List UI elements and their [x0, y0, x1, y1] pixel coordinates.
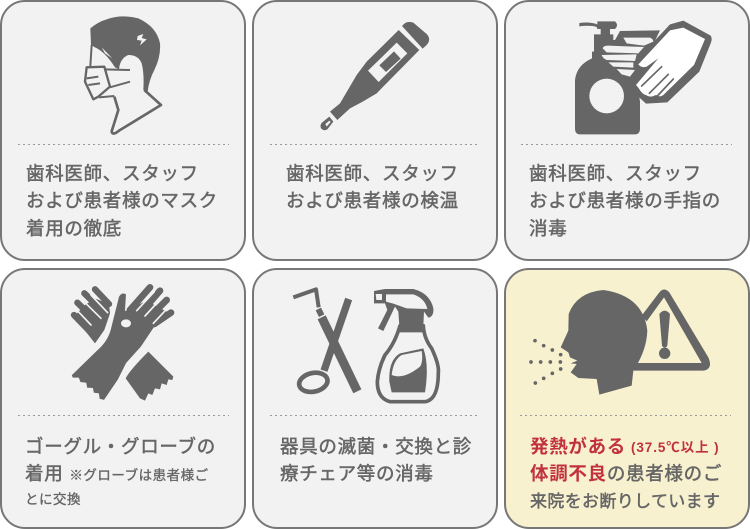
icon: dental tools	[293, 289, 357, 394]
panel: goggles and gloves	[1, 269, 245, 528]
icon: soap and hand	[575, 21, 712, 134]
panel: fever warning	[505, 269, 749, 528]
text: hand disinfection	[529, 163, 721, 239]
icon: masked face	[85, 16, 161, 134]
panel: instrument sterilisation	[253, 269, 497, 528]
text: hand disinfection: および患者様の手指の	[529, 190, 721, 211]
text: instrument sterilisation	[280, 436, 472, 484]
text: mask: および患者様のマスク	[26, 190, 218, 211]
text: fever warning: 体調不良の患者様のご	[530, 463, 722, 484]
text: instrument sterilisation: 器具の滅菌・交換と診	[280, 436, 472, 457]
text: gloves: とに交換	[25, 492, 81, 507]
text: instrument sterilisation: 療チェア等の消毒	[280, 463, 434, 484]
text: gloves: 着用 ※グローブは患者様ご	[25, 463, 209, 484]
icon: coughing head	[529, 290, 647, 395]
text: mask: 着用の徹底	[26, 218, 122, 239]
text: fever warning	[530, 436, 722, 511]
text: mask: 歯科医師、スタッフ	[26, 163, 199, 184]
icon: spray bottle	[374, 289, 438, 402]
text: fever warning: 来院をお断りしています	[530, 492, 720, 511]
text: thermometer	[286, 163, 459, 211]
text: thermometer: および患者様の検温	[286, 190, 459, 211]
text: gloves	[25, 436, 216, 507]
panel: hand disinfection	[505, 1, 749, 260]
panel: thermometer	[253, 1, 497, 260]
icon: gloves	[71, 287, 173, 401]
text: thermometer: 歯科医師、スタッフ	[286, 163, 459, 184]
icon: thermometer	[320, 22, 429, 130]
text: mask	[26, 163, 218, 239]
text: fever warning: 発熱がある	[530, 436, 626, 457]
icon: warning triangle	[633, 289, 710, 371]
text: hand disinfection: 消毒	[529, 218, 567, 239]
text: gloves: ゴーグル・グローブの	[25, 436, 216, 457]
text: fever warning: (37.5℃以上 )	[631, 440, 720, 455]
text: hand disinfection: 歯科医師、スタッフ	[529, 163, 702, 184]
panel: mask	[1, 1, 245, 260]
